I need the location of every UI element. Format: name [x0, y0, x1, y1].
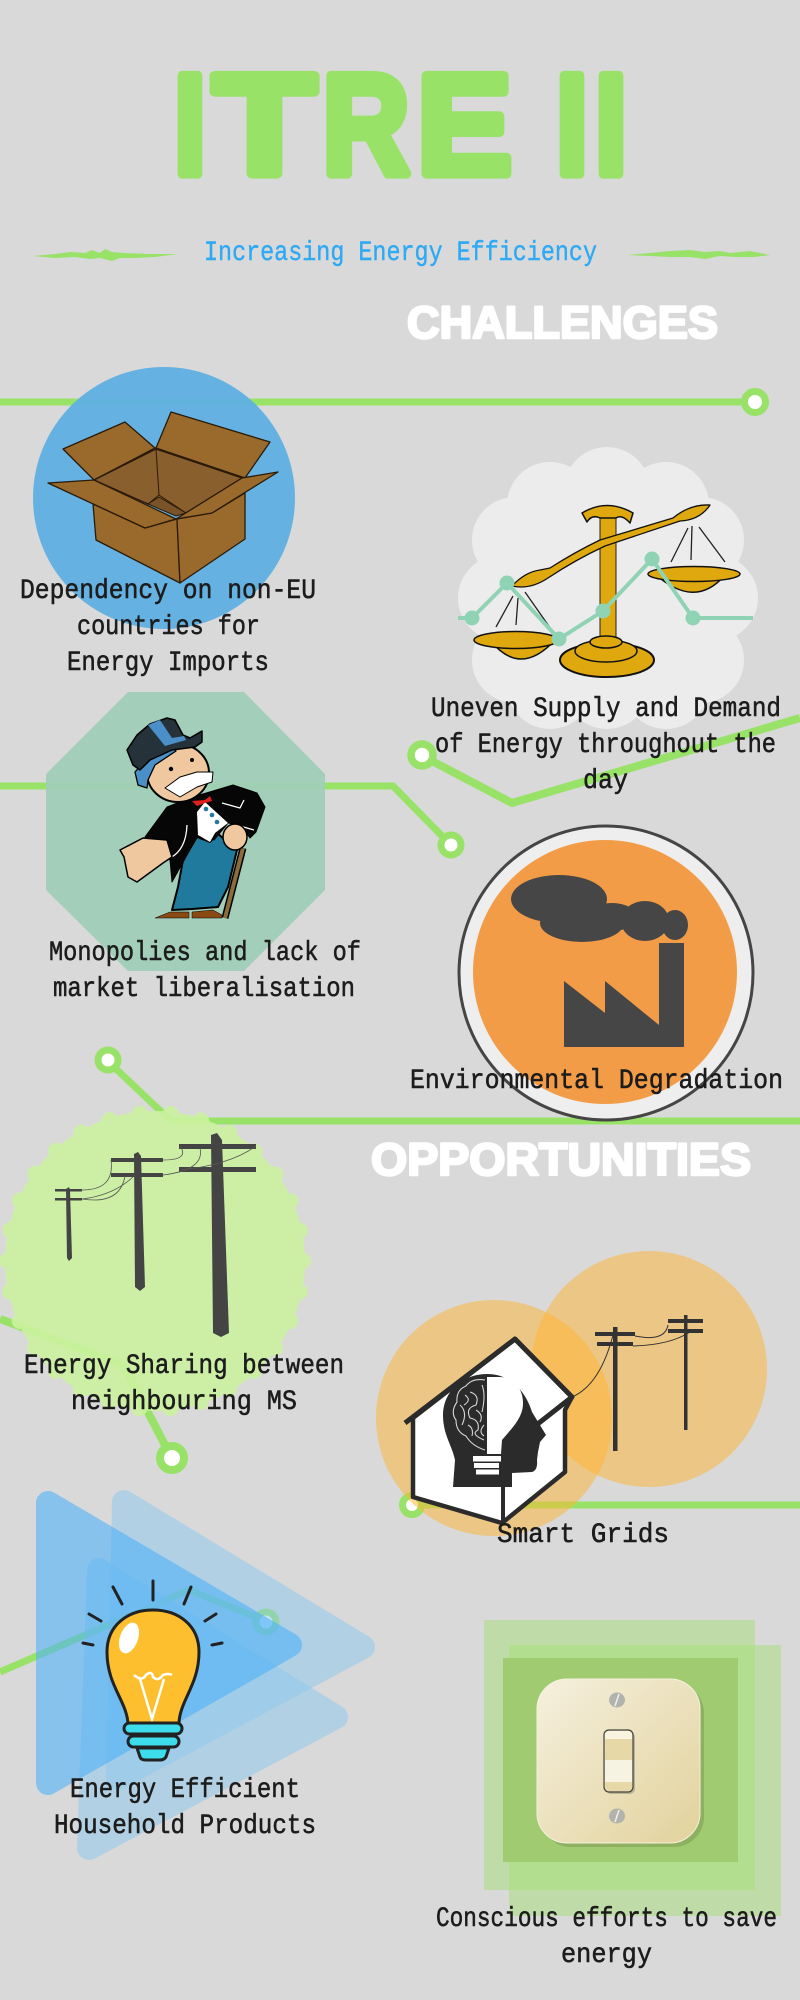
connector line 5 [0, 1319, 184, 1470]
label: Energy Efficient [70, 1775, 300, 1806]
panel: household products [48, 1502, 363, 1848]
label: Household Products [54, 1811, 316, 1842]
connector line 2 [411, 718, 800, 803]
label: countries for [77, 612, 260, 643]
label: Dependency on non-EU [20, 576, 316, 607]
brush stroke left [33, 249, 178, 261]
outer ring [459, 826, 753, 1120]
connector line 6 [402, 1496, 800, 1514]
panel: environmental degradation [410, 826, 783, 1120]
icon: poles [572, 1315, 703, 1451]
label: day [583, 766, 628, 797]
heading: opportunities: OPPORTUNITIES [371, 1134, 751, 1185]
icon: monopoly man [120, 718, 265, 918]
title: I [174, 46, 206, 205]
title: E [417, 46, 512, 205]
panel: monopolies [46, 692, 361, 1005]
cloud [458, 447, 758, 729]
panel: energy sharing [5, 1111, 344, 1418]
label: neighbouring MS [71, 1387, 297, 1418]
blue circle [33, 367, 295, 629]
icon: cardboard box [48, 412, 278, 583]
label: energy [561, 1940, 652, 1971]
panel: energy imports [20, 367, 316, 679]
title: I [595, 46, 627, 205]
icon: scales [474, 505, 740, 677]
heading: challenges: CHALLENGES [407, 297, 718, 348]
teal line chart [458, 552, 753, 646]
title: I [556, 46, 588, 205]
panel: smart grids [376, 1251, 767, 1551]
scalloped badge [5, 1111, 305, 1411]
panel: conscious efforts [436, 1620, 781, 1971]
green squares [484, 1620, 755, 1890]
orange circles [376, 1251, 767, 1536]
blue triangles [48, 1502, 363, 1848]
icon: power poles [55, 1133, 256, 1337]
label: Energy Imports [67, 648, 269, 679]
brush stroke right [627, 250, 770, 259]
label: Smart Grids [497, 1520, 669, 1551]
icon: factory [511, 875, 688, 1047]
connector line 3 [0, 786, 461, 855]
icon: house with head and bulb [405, 1339, 572, 1523]
orange disc [473, 840, 737, 1104]
connector line 1 [0, 392, 766, 412]
connector line 7 [0, 1590, 276, 1672]
panel: uneven supply and demand [431, 447, 781, 797]
icon: light bulb [83, 1581, 222, 1760]
title: R [322, 46, 410, 205]
octagon [46, 692, 325, 971]
title: T [214, 46, 316, 205]
connector line 4 [98, 1050, 800, 1121]
subtitle: Increasing Energy Efficiency [204, 238, 597, 269]
label: Monopolies and lack of [49, 938, 361, 969]
label: market liberalisation [53, 974, 355, 1005]
label: Energy Sharing between [24, 1351, 344, 1382]
icon: light switch [537, 1679, 704, 1847]
